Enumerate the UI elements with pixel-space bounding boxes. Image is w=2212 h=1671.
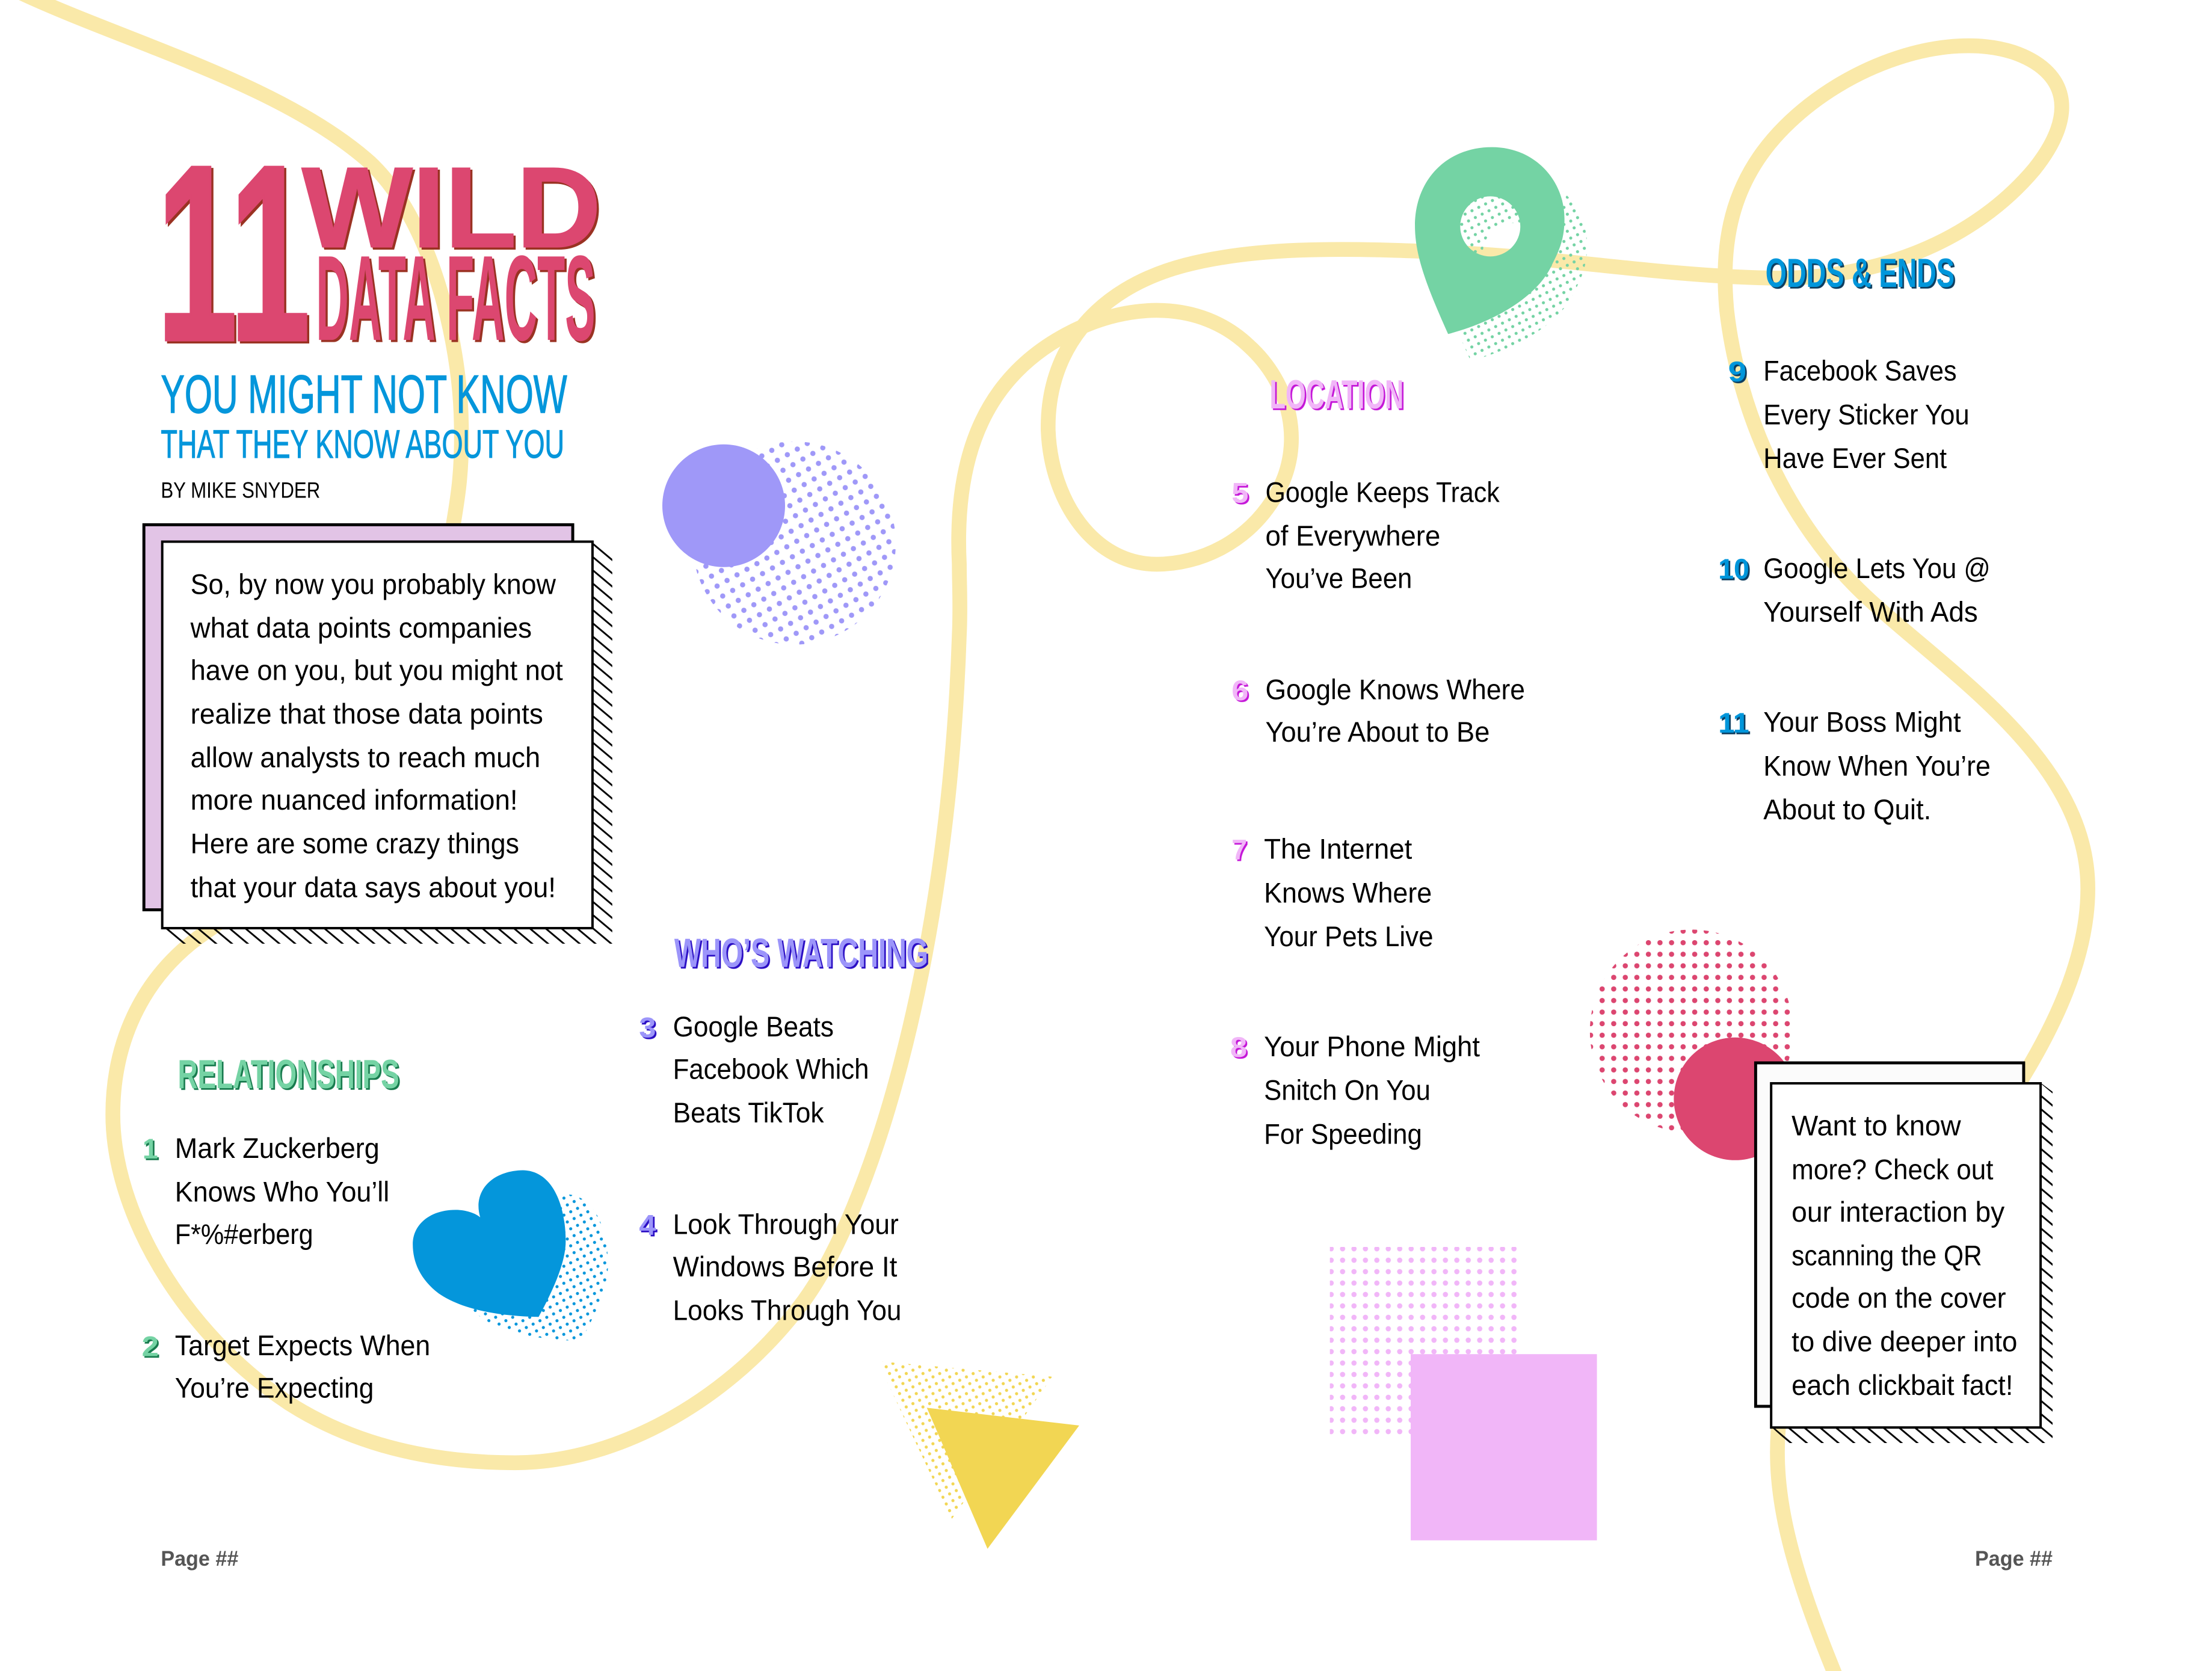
intro text: Here are some crazy things [191,828,519,860]
right page number: Page ## [1975,1547,2053,1571]
byline: BY MIKE SNYDER [161,478,320,502]
fact 5: 5 [1231,478,1248,509]
fact 10: 10 [1718,553,1749,585]
fact 6: 6 [1231,675,1248,706]
title block [156,113,601,393]
fact 11: Know When You’re [1763,750,1991,781]
fact 8: 8 [1230,1032,1247,1063]
hatched shadow [162,540,612,944]
panel: closing card [1755,1063,2053,1443]
section: location [1230,372,1525,1149]
fact 4: Looks Through You [673,1294,901,1326]
left page number: Page ## [161,1547,238,1571]
closing text: scanning the QR [1791,1240,1982,1271]
fact 2: Target Expects When [175,1330,430,1361]
intro text [190,568,563,903]
fact 9: Facebook Saves [1763,355,1957,387]
white front card [1771,1083,2041,1427]
subtitle line 2: THAT THEY KNOW ABOUT YOU [161,422,564,466]
intro text: what data points companies [190,612,532,644]
panel: intro card [144,525,612,944]
fact 5: You’ve Been [1265,562,1412,594]
fact 9 [1728,355,1970,474]
intro text: more nuanced information! [191,784,518,816]
closing text [1791,1110,2017,1401]
fact 10: Yourself With Ads [1763,597,1978,628]
fact 6: You’re About to Be [1265,716,1490,748]
fact 3: 3 [639,1012,656,1043]
fact 1 [143,1133,389,1250]
intro text: realize that those data points [191,698,543,730]
fact 1: Knows Who You’ll [175,1176,389,1207]
closing text: Want to know [1791,1110,1961,1142]
fact 6: Google Knows Where [1265,674,1525,706]
closing text: code on the cover [1791,1282,2006,1314]
fact 5: of Everywhere [1265,520,1440,552]
fact 8: For Speeding [1264,1118,1422,1149]
fact 7: The Internet [1264,834,1412,865]
fact 2: 2 [142,1331,159,1362]
icon: purple circle with halftone [662,442,896,645]
fact 5 [1231,476,1500,594]
fact 4 [639,1208,901,1326]
closing text: our interaction by [1791,1196,2005,1228]
fact 2 [142,1330,430,1403]
section: relationships [142,1051,430,1403]
icon: red circle with halftone [1590,929,1796,1160]
fact 5: Google Keeps Track [1265,476,1500,508]
pink back card [144,525,573,910]
fact 4: Windows Before It [673,1251,897,1282]
fact 1: F*%#erberg [175,1219,313,1250]
fact 1: Mark Zuckerberg [175,1133,380,1164]
fact 7 [1231,834,1434,952]
icon: yellow triangle with halftone [878,1361,1079,1549]
fact 7: Your Pets Live [1264,921,1434,952]
fact 9: Have Ever Sent [1763,443,1947,474]
fact 3: Beats TikTok [673,1097,824,1128]
hatched shadow [1772,1083,2053,1443]
white front card [162,541,593,928]
closing text: to dive deeper into [1791,1326,2017,1358]
fact 8 [1230,1031,1480,1149]
icon: green location pin with halftone [1415,147,1587,361]
intro text: allow analysts to reach much [191,742,540,774]
fact 11: About to Quit. [1763,794,1931,825]
fact 11 [1718,707,1991,825]
fact 8: Snitch On You [1264,1075,1431,1106]
fact 3 [639,1011,869,1128]
fact 4: Look Through Your [673,1208,899,1240]
closing text: each clickbait fact! [1791,1370,2013,1401]
heading: relationships: RELATIONSHIPS [177,1051,399,1097]
fact 9: 9 [1728,356,1746,387]
heading: odds and ends: ODDS & ENDS [1766,250,1955,296]
subtitle line 1: YOU MIGHT NOT KNOW [161,364,567,424]
fact 11: 11 [1718,707,1749,739]
fact 7: 7 [1231,834,1247,866]
section: who's watching [639,931,928,1326]
back card [1755,1063,2024,1406]
fact 3: Google Beats [673,1011,834,1042]
fact 9: Every Sticker You [1763,399,1970,430]
closing text: more? Check out [1791,1154,1994,1185]
fact 10 [1718,553,1991,628]
intro text: that your data says about you! [191,872,556,903]
text: DATA FACTS [316,230,596,366]
title number 11: 11 [156,113,310,393]
fact 10: Google Lets You @ [1763,553,1991,584]
section: odds and ends [1718,250,1991,825]
fact 11: Your Boss Might [1763,707,1961,738]
intro text: So, by now you probably know [191,568,556,600]
title word WILD: WILD [302,144,601,271]
fact 2: You’re Expecting [175,1372,374,1403]
fact 6 [1231,674,1525,748]
fact 4: 4 [639,1210,656,1241]
icon: pink squares with halftone [1330,1247,1597,1540]
fact 7: Knows Where [1264,877,1432,908]
heading: location: LOCATION [1270,372,1403,417]
fact 8: Your Phone Might [1264,1031,1480,1062]
fact 3: Facebook Which [673,1053,869,1085]
intro text: have on you, but you might not [191,654,563,686]
fact 1: 1 [143,1133,158,1165]
heading: who's watching: WHO’S WATCHING [674,931,928,976]
icon: blue heart with halftone [413,1170,608,1341]
